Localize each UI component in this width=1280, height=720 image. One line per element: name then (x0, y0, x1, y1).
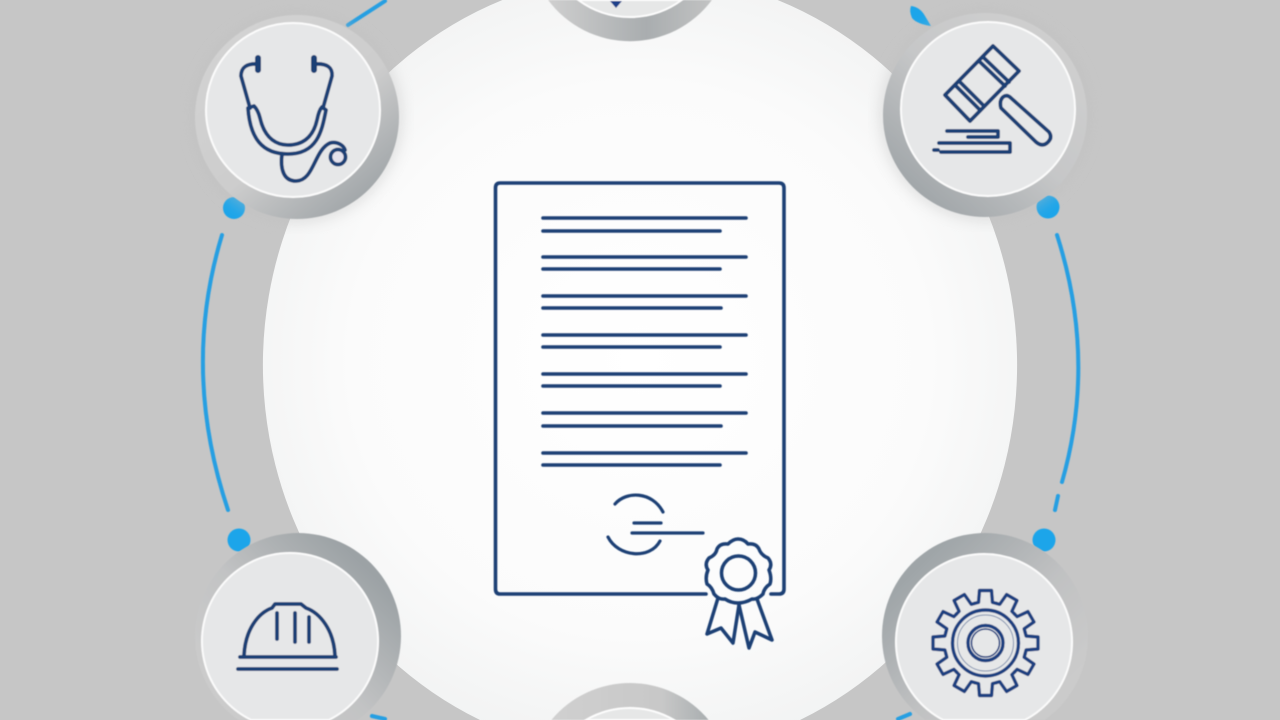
icon: ribbon seal (706, 539, 772, 648)
document text lines (543, 218, 746, 465)
icon: gavel (934, 46, 1051, 152)
node: gavel (879, 9, 1091, 221)
signature (608, 495, 703, 554)
document (496, 183, 784, 648)
central white disc (263, 0, 1017, 720)
blue dots (223, 6, 1060, 552)
icon: stethoscope (241, 58, 346, 181)
icon: gear (933, 590, 1038, 696)
node: stethoscope (191, 11, 403, 223)
node: top, partly cropped (548, 0, 712, 41)
node: hard hat (195, 533, 401, 720)
node: gear (882, 533, 1088, 720)
blue connector ring segments (203, 1, 1078, 719)
document outline (496, 183, 784, 594)
node: bottom, partly cropped (551, 683, 709, 720)
icon: hard hat (238, 604, 337, 669)
